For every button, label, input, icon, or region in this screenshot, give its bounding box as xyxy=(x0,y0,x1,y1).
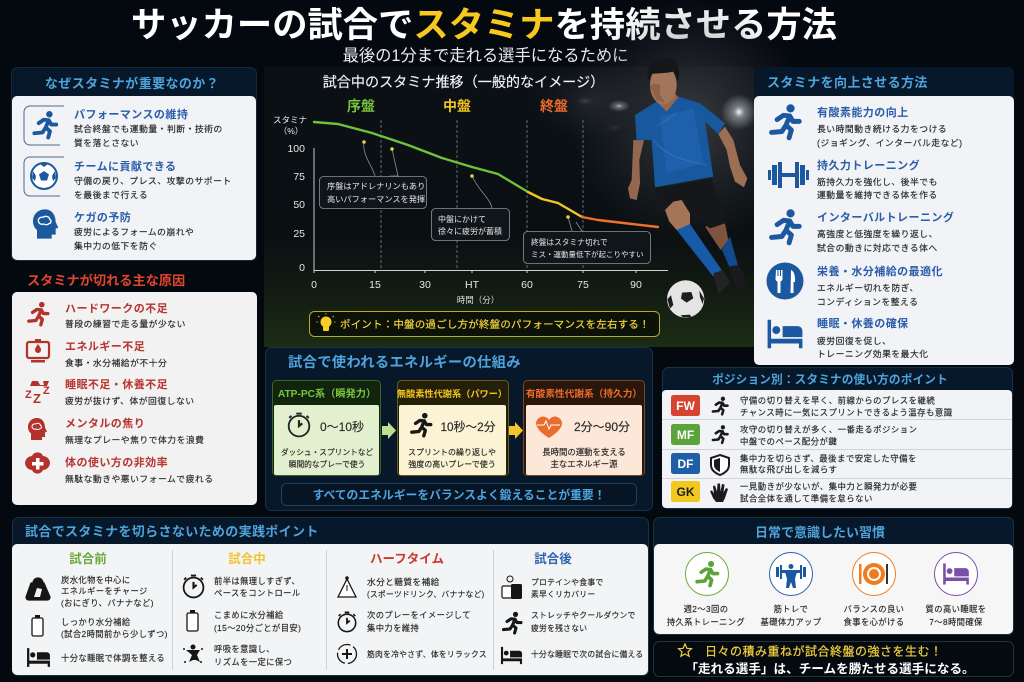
column: before match: (試合2時間前から少しずつ) xyxy=(61,629,168,639)
item: lack of sleep: Z xyxy=(33,391,41,406)
column: before match: 炭水化物を中心に xyxy=(61,575,131,585)
card: aerobic: 有酸素性代謝系（持久力） xyxy=(526,387,642,400)
arrow xyxy=(382,422,396,439)
panel: closing message xyxy=(654,642,1014,676)
row: DF: 集中力を切らさず、最後まで安定した守備を xyxy=(740,454,917,464)
item: lack of sleep xyxy=(25,377,195,406)
card: anaerobic: 強度の高いプレーで使う xyxy=(408,459,496,469)
icon: relax timer xyxy=(338,644,356,664)
panel: energy systems xyxy=(266,348,652,510)
habit: balanced meal: バランスの良い xyxy=(844,604,904,614)
y axis: スタミナ xyxy=(273,115,307,125)
item: interval: 試合の動きに対応できる体へ xyxy=(817,242,938,253)
habit: balanced meal: 食事を心がける xyxy=(844,617,904,627)
subtitle: 最後の1分まで走れる選手になるために xyxy=(343,47,628,65)
y axis: 0 xyxy=(299,262,305,274)
heading: 日常で意識したい習慣 xyxy=(755,525,885,540)
column: during match: 試合中 xyxy=(228,551,266,566)
card: aerobic: 主なエネルギー源 xyxy=(550,459,618,469)
column: before match: 十分な睡眠で体調を整える xyxy=(61,653,165,663)
phase labels: 終盤 xyxy=(540,98,568,114)
row: FW: チャンス時に一気にスプリントできるよう温存も意識 xyxy=(740,408,953,418)
item: mental impatience: 無理なプレーや焦りで体力を浪費 xyxy=(65,434,204,445)
row: MF xyxy=(671,424,918,446)
card: ATP-PC: ダッシュ・スプリントなど xyxy=(281,447,373,457)
soccer ball xyxy=(667,280,704,318)
card: ATP-PC xyxy=(272,380,380,476)
heading: 試合でスタミナを切らさないための実践ポイント xyxy=(25,524,319,539)
icon: bag xyxy=(26,578,50,600)
x axis: 時間（分） xyxy=(457,295,499,305)
row: DF: DF xyxy=(678,457,694,471)
item: inefficient movement: 体の使い方の非効率 xyxy=(65,455,168,469)
item: injury prevention: ケガの予防 xyxy=(74,210,131,224)
arrow xyxy=(509,422,523,439)
column: before match: (おにぎり、バナナなど) xyxy=(61,598,154,608)
callout: early xyxy=(320,140,426,208)
heading: なぜスタミナが重要なのか？ xyxy=(45,76,219,91)
panel: tips by position xyxy=(662,368,1012,508)
column: after match: 疲労を残さない xyxy=(531,623,587,633)
callout: balance: すべてのエネルギーをバランスよく鍛えることが重要！ xyxy=(312,488,606,502)
icon: light bulb xyxy=(316,313,336,331)
item: lack of hard work: ハードワークの不足 xyxy=(65,302,168,315)
item: endurance: 持久力トレーニング xyxy=(817,158,920,172)
x axis: 30 xyxy=(419,279,431,291)
callout: middle: 中盤にかけて xyxy=(438,214,486,224)
item: performance: 質を落とさない xyxy=(74,137,139,148)
column: half time: ハーフタイム xyxy=(370,552,444,566)
item: sleep: 疲労回復を促し、 xyxy=(817,335,891,346)
heading: スタミナが切れる主な原因 xyxy=(27,272,185,288)
callout: early: 序盤はアドレナリンもあり xyxy=(327,181,425,191)
card: ATP-PC: 0～10秒 xyxy=(320,420,364,434)
item: nutrition: コンディションを整える xyxy=(817,296,918,307)
heading: ポジション別：スタミナの使い方のポイント xyxy=(712,372,948,386)
item: aerobic xyxy=(772,104,963,148)
item: mental impatience xyxy=(28,416,204,445)
column: half time: 次のプレーをイメージして xyxy=(367,610,471,620)
item: endurance xyxy=(768,158,938,200)
phase labels xyxy=(347,98,568,114)
row: GK: 一見動きが少ないが、集中力と瞬発力が必要 xyxy=(740,482,917,492)
item: lack of hard work xyxy=(29,302,186,329)
card: aerobic: 2分～90分 xyxy=(574,420,630,434)
column: after match xyxy=(501,551,643,664)
icon: breathing figure xyxy=(183,644,203,663)
item: team contribution: 守備の戻り、プレス、攻撃のサポート xyxy=(74,175,232,186)
column: after match: 試合後 xyxy=(534,551,572,566)
item: injury prevention: 集中力の低下を防ぐ xyxy=(74,240,158,251)
card: aerobic: 長時間の運動を支える xyxy=(542,447,626,457)
column: before match: エネルギーをチャージ xyxy=(61,586,148,596)
row: MF: MF xyxy=(677,428,694,442)
column: during match: リズムを一定に保つ xyxy=(214,657,292,667)
item: nutrition: 栄養・水分補給の最適化 xyxy=(817,264,943,278)
panel: practical points xyxy=(12,518,648,676)
row: GK: 試合全体を通して準備を怠らない xyxy=(740,494,873,504)
column: after match: 十分な睡眠で次の試合に備える xyxy=(531,649,643,659)
item: endurance: 運動量を維持できる体を作る xyxy=(817,189,938,200)
habit: endurance: 持久系トレーニング xyxy=(667,617,745,627)
column: half time: 集中力を維持 xyxy=(367,623,419,633)
item: interval: インターバルトレーニング xyxy=(817,210,954,224)
player illustration xyxy=(628,58,747,318)
habit: quality sleep: 質の高い睡眠を xyxy=(926,604,986,614)
stamina curve xyxy=(314,122,658,227)
column: half time xyxy=(338,552,487,664)
item: team contribution: チームに貢献できる xyxy=(74,159,176,173)
item: lack of sleep: 疲労が抜けず、体が回復しない xyxy=(65,395,195,406)
x axis: HT xyxy=(465,279,480,291)
item: aerobic: (ジョギング、インターバル走など) xyxy=(817,137,963,148)
column: during match: ペースをコントロール xyxy=(214,588,301,598)
panel: daily habits xyxy=(654,518,1014,634)
item: aerobic: 長い時間動き続ける力をつける xyxy=(817,123,947,134)
card: anaerobic xyxy=(397,380,508,476)
card: ATP-PC: 瞬間的なプレーで使う xyxy=(289,459,365,469)
item: lack of sleep: 睡眠不足・休養不足 xyxy=(65,377,168,391)
panel: closing message: 「走れる選手」は、チームを勝たせる選手になる。 xyxy=(685,661,975,676)
habit: balanced meal xyxy=(844,552,904,627)
row: FW xyxy=(671,395,953,418)
icon: bottle triangle xyxy=(338,576,356,597)
item: lack of energy xyxy=(27,339,167,368)
item: lack of sleep: Z xyxy=(25,389,32,401)
callout: balance xyxy=(282,484,636,506)
item: team contribution: を最後まで行える xyxy=(74,189,148,200)
item: sleep: 睡眠・休養の確保 xyxy=(817,316,909,330)
callout: key point bar: ポイント：中盤の過ごし方が終盤のパフォーマンスを左右する！ xyxy=(340,318,650,331)
column: during match: こまめに水分補給 xyxy=(214,610,284,620)
column: during match: 前半は無理しすぎず、 xyxy=(214,576,300,586)
row: GK: GK xyxy=(676,485,695,499)
column: during match: 呼吸を意識し、 xyxy=(214,644,275,654)
y axis: （%） xyxy=(279,126,303,136)
item: lack of energy: エネルギー不足 xyxy=(65,340,145,353)
column: after match: ストレッチやクールダウンで xyxy=(531,610,636,620)
row: FW: FW xyxy=(676,399,696,413)
row: FW: 守備の切り替えを早く、前線からのプレスを継続 xyxy=(740,396,935,406)
item: sleep xyxy=(768,316,929,359)
item: injury prevention xyxy=(33,209,194,251)
habit: quality sleep: 7～8時間確保 xyxy=(929,617,983,627)
y axis: 100 xyxy=(287,143,305,155)
row: DF: 無駄な飛び出しを減らす xyxy=(740,464,837,474)
chart heading: 試合中のスタミナ推移（一般的なイメージ） xyxy=(323,74,604,90)
callout: early: 高いパフォーマンスを発揮 xyxy=(327,194,425,204)
panel: causes of stamina loss xyxy=(12,272,257,505)
callout: middle: 徐々に疲労が蓄積 xyxy=(438,226,502,236)
item: team contribution xyxy=(24,157,232,200)
habit: strength: 筋トレで xyxy=(774,604,808,614)
card: anaerobic: スプリントの繰り返しや xyxy=(408,447,496,457)
icon: star xyxy=(678,644,692,656)
item: performance xyxy=(24,106,223,148)
column: after match: プロテインや食事で xyxy=(531,577,603,587)
column: during match: (15～20分ごとが目安) xyxy=(214,623,301,633)
column: during match xyxy=(183,551,301,667)
item: interval: 高強度と低強度を繰り返し、 xyxy=(817,228,938,239)
icon: protein xyxy=(502,576,522,599)
habit: strength: 基礎体力アップ xyxy=(761,617,822,627)
card: ATP-PC: ATP-PC系（瞬発力） xyxy=(278,387,376,400)
y axis: 75 xyxy=(293,171,305,183)
column: half time: 水分と糖質を補給 xyxy=(367,576,440,587)
callout: late xyxy=(524,215,650,264)
column: after match: 素早くリカバリー xyxy=(531,589,595,599)
column: before match: 試合前 xyxy=(69,551,107,566)
x axis: 90 xyxy=(630,279,642,291)
card: anaerobic: 無酸素性代謝系（パワー） xyxy=(397,388,507,399)
item: inefficient movement xyxy=(25,452,214,484)
item: inefficient movement: 無駄な動きや悪いフォームで疲れる xyxy=(65,473,214,484)
column: before match xyxy=(26,551,168,667)
panel: why stamina matters xyxy=(12,68,256,260)
row: GK xyxy=(671,481,917,504)
row: MF: 中盤でのペース配分が鍵 xyxy=(740,436,837,446)
x axis: 75 xyxy=(577,279,589,291)
panel: how to improve stamina xyxy=(754,67,1014,365)
callout: late: 終盤はスタミナ切れで xyxy=(531,237,608,247)
x axis: 60 xyxy=(521,279,533,291)
stadium lights xyxy=(577,94,757,132)
callout: middle xyxy=(432,174,510,240)
card: aerobic xyxy=(524,380,644,476)
heading: 試合で使われるエネルギーの仕組み xyxy=(288,353,521,371)
habit: endurance: 週2～3回の xyxy=(684,604,728,614)
row: MF: 攻守の切り替えが多く、一番走るポジション xyxy=(740,424,918,434)
x axis: 15 xyxy=(369,279,381,291)
x axis: 0 xyxy=(311,279,317,291)
column: before match: しっかり水分補給 xyxy=(61,617,131,627)
item: nutrition xyxy=(766,262,943,307)
phase labels: 序盤 xyxy=(347,98,375,114)
panel: stamina chart xyxy=(264,0,810,347)
column: half time: 筋肉を冷やさず、体をリラックス xyxy=(367,649,487,659)
column: half time: (スポーツドリンク、バナナなど) xyxy=(367,590,485,599)
callout: late: ミス・運動量低下が起こりやすい xyxy=(531,249,644,259)
y axis: 50 xyxy=(293,199,305,211)
icon: bottle xyxy=(32,615,43,636)
item: lack of hard work: 普段の練習で走る量が少ない xyxy=(65,318,186,329)
item: endurance: 筋持久力を強化し、後半でも xyxy=(817,176,938,187)
item: performance: 試合終盤でも運動量・判断・技術の xyxy=(74,123,223,134)
heading: スタミナを向上させる方法 xyxy=(767,75,928,90)
item: aerobic: 有酸素能力の向上 xyxy=(817,105,909,119)
icon: soccer ball xyxy=(31,163,57,189)
item: interval xyxy=(772,209,954,253)
panel: closing message: 日々の積み重ねが試合終盤の強さを生む！ xyxy=(705,644,943,658)
phase labels: 中盤 xyxy=(443,98,471,114)
y axis xyxy=(273,115,314,274)
item: mental impatience: メンタルの焦り xyxy=(65,416,145,430)
stadium haze xyxy=(530,0,810,245)
item: performance: パフォーマンスの維持 xyxy=(74,107,188,121)
x axis xyxy=(311,270,668,305)
icon: bottle xyxy=(187,610,198,631)
y axis: 25 xyxy=(293,228,305,240)
item: lack of sleep: Z xyxy=(43,385,50,397)
item: lack of energy: 食事・水分補給が不十分 xyxy=(65,357,167,368)
habit: strength xyxy=(761,552,822,627)
icon: heart xyxy=(536,417,562,438)
card: anaerobic: 10秒～2分 xyxy=(440,420,496,434)
item: sleep: トレーニング効果を最大化 xyxy=(817,348,929,359)
callout: key point bar xyxy=(310,312,660,336)
title: サッカーの試合でスタミナを持続させる方法 xyxy=(131,6,837,45)
habit: endurance xyxy=(667,552,745,627)
row: DF xyxy=(671,453,917,475)
item: nutrition: エネルギー切れを防ぎ、 xyxy=(817,282,919,293)
item: injury prevention: 疲労によるフォームの崩れや xyxy=(74,226,194,237)
habit: quality sleep xyxy=(926,552,986,627)
